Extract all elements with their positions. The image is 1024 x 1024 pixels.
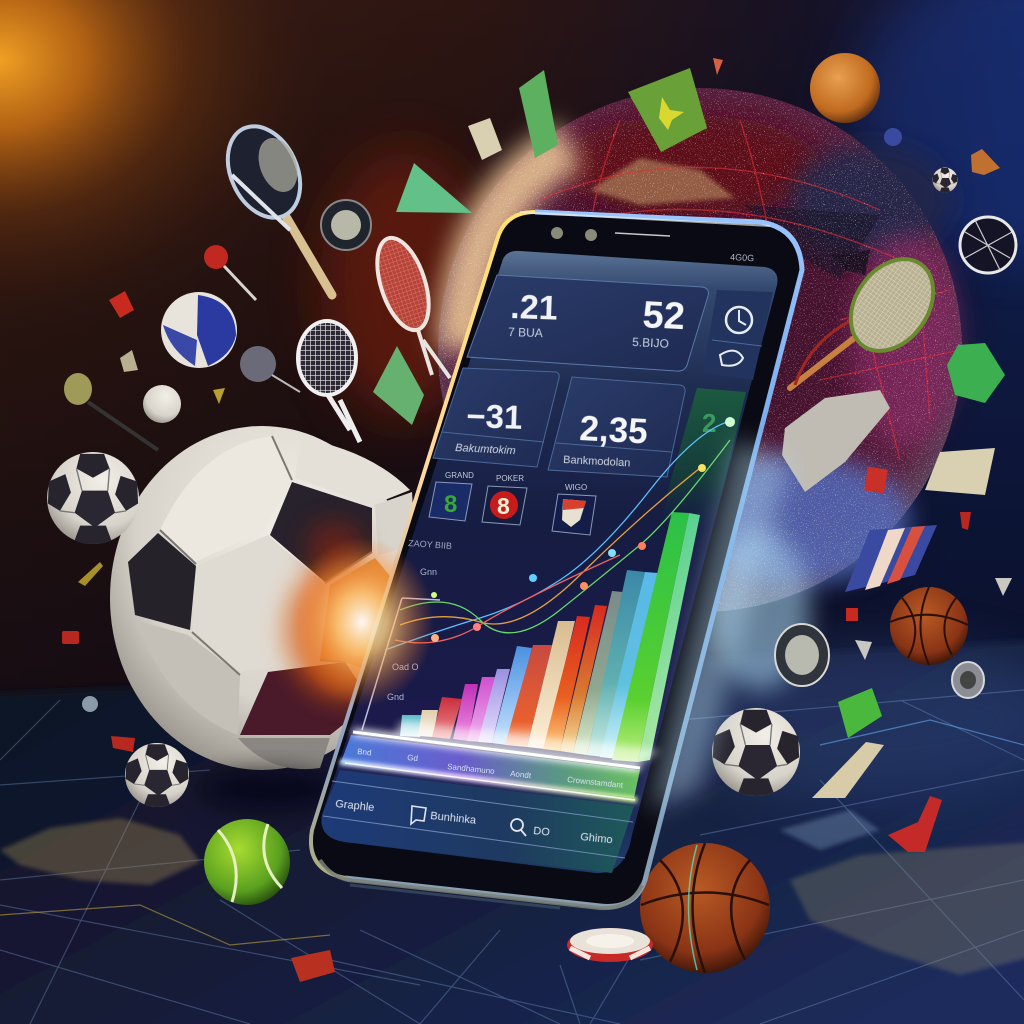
- red chip left: [109, 291, 134, 318]
- badge shield: WIGO: [565, 483, 587, 492]
- map glitter left: [0, 818, 200, 885]
- red piece right: [864, 466, 888, 494]
- glow baseline: [353, 732, 640, 768]
- tiny soccer ball: [932, 168, 958, 192]
- red cone floor: [888, 796, 942, 852]
- floor with map grid: [0, 640, 1024, 1024]
- badge green: [429, 471, 474, 521]
- soccer ball left: [47, 452, 139, 544]
- badge shield: [552, 483, 596, 535]
- bar base glow: [395, 722, 660, 766]
- top edge highlight: [520, 212, 770, 226]
- shoe sole: [782, 390, 890, 492]
- icon: chat: [411, 806, 426, 824]
- red small right: [960, 512, 971, 530]
- yellow piece: [78, 562, 103, 586]
- card: 2,35: 2,35: [579, 409, 649, 452]
- bottom navigation: [321, 770, 634, 873]
- x-axis labels: Aondt: [510, 769, 532, 780]
- section label: ZAOY BIIB: [408, 538, 452, 551]
- chart axis labels: Gnn: [420, 567, 437, 577]
- phone bottom rim: [320, 860, 642, 908]
- striped flag: [845, 525, 937, 592]
- x-axis labels: Sandhamuno: [447, 762, 496, 776]
- racket: dark top-left: [214, 115, 332, 295]
- card: -31: −31: [466, 397, 523, 436]
- chart axis labels: Gnd: [387, 692, 404, 702]
- red piece floor: [111, 736, 135, 752]
- basketball foreground: [640, 843, 770, 973]
- chart axis labels: Oad O: [392, 662, 419, 672]
- small ball floor: [82, 696, 98, 712]
- icon: search: [511, 819, 526, 836]
- phone right edge: [345, 212, 802, 906]
- phone left edge glow: [311, 212, 535, 878]
- large soccer ball: [110, 426, 415, 770]
- green cube right: [947, 343, 1005, 403]
- racket: white mesh: [298, 321, 360, 442]
- lower glow line: [340, 762, 637, 800]
- tiny ball: [884, 128, 902, 146]
- poker chip top: [321, 200, 371, 250]
- mini card: timer: [703, 290, 773, 380]
- grey funnel right: [995, 578, 1012, 596]
- map glitter center right: [780, 810, 880, 850]
- x-axis labels: Gd: [407, 753, 418, 763]
- globe: [438, 88, 962, 690]
- glow: ball meets phone: [290, 537, 434, 707]
- red dot right: [846, 608, 858, 621]
- chart frame: [362, 598, 440, 730]
- camera dots: [551, 227, 670, 241]
- tennis ball: [204, 819, 290, 905]
- card: -31: [433, 368, 559, 467]
- paper note top: [468, 118, 502, 160]
- racket: beige mesh right: [790, 243, 950, 388]
- green block floor: [838, 688, 882, 738]
- green shard: [373, 346, 424, 425]
- x-axis labels: Bnd: [357, 747, 372, 757]
- x-axis labels: [357, 747, 624, 790]
- bottom navigation: DO: [533, 825, 551, 839]
- team badges row: [429, 471, 596, 535]
- green triangle: [396, 163, 472, 213]
- phone body: [311, 212, 802, 906]
- card: -31: Bakumtokim: [455, 442, 516, 457]
- glow baseline core: [353, 732, 640, 768]
- chart axis labels: [387, 567, 437, 702]
- card: green trend: [660, 388, 746, 540]
- racket: small far-left: [64, 373, 158, 450]
- cone small: [855, 640, 872, 660]
- badge green: GRAND: [445, 471, 474, 480]
- white paper right: [925, 448, 995, 495]
- card: 2,35: [548, 377, 685, 477]
- x-axis band: [341, 735, 640, 798]
- card: top score: .21: [510, 288, 558, 328]
- orange ball: [810, 53, 880, 123]
- red chip floor: [291, 950, 335, 982]
- soccer ball right: [712, 708, 800, 796]
- red dice left: [62, 631, 79, 644]
- card: top score: 52: [642, 294, 686, 338]
- card: top score: [467, 275, 708, 371]
- bottom navigation: Bunhinka: [430, 810, 477, 827]
- bicycle wheel icon: [960, 217, 1016, 273]
- card: 2,35: Bankmodolan: [563, 454, 631, 470]
- badge green: 8: [444, 491, 457, 518]
- racket: red: [367, 232, 450, 378]
- screen: [321, 251, 778, 873]
- shadow on floor: [200, 770, 340, 810]
- map glitter right: [790, 840, 1024, 975]
- line chart: [385, 417, 735, 650]
- badge red: [482, 474, 527, 525]
- green note star: [628, 68, 707, 152]
- badge red: 8: [497, 493, 510, 519]
- lower glow line core: [345, 763, 635, 800]
- x-axis labels: Crownstamdant: [567, 775, 624, 790]
- chip small right: [952, 662, 984, 698]
- soccer ball foreground: [125, 743, 189, 807]
- volleyball: [161, 292, 237, 368]
- orange piece top right: [971, 149, 1000, 175]
- pin top: [713, 58, 723, 75]
- card: green trend: 2: [702, 408, 716, 438]
- bar chart: [400, 512, 700, 762]
- yellow orb: [213, 388, 225, 404]
- phone side button glow: [350, 885, 560, 908]
- poker chip right: [775, 624, 829, 686]
- racket: small mid-left: [240, 346, 300, 392]
- bottom navigation: Graphle: [335, 798, 375, 814]
- glow: phone right haze: [650, 440, 790, 810]
- beige note floor: [812, 742, 884, 798]
- card: top score: 5.BIJO: [632, 335, 669, 351]
- lollipop icon: [204, 245, 256, 300]
- phone: [311, 212, 802, 906]
- casino chip center: [567, 928, 653, 962]
- shuttle left: [120, 350, 138, 372]
- green note top: [519, 70, 558, 158]
- card: top score: 7 BUA: [508, 325, 543, 340]
- basketball right: [890, 587, 968, 665]
- badge red: POKER: [496, 474, 524, 483]
- bottom navigation: Ghimo: [580, 831, 613, 846]
- small white ball: [143, 385, 181, 423]
- signal status: 4G0G: [730, 252, 754, 263]
